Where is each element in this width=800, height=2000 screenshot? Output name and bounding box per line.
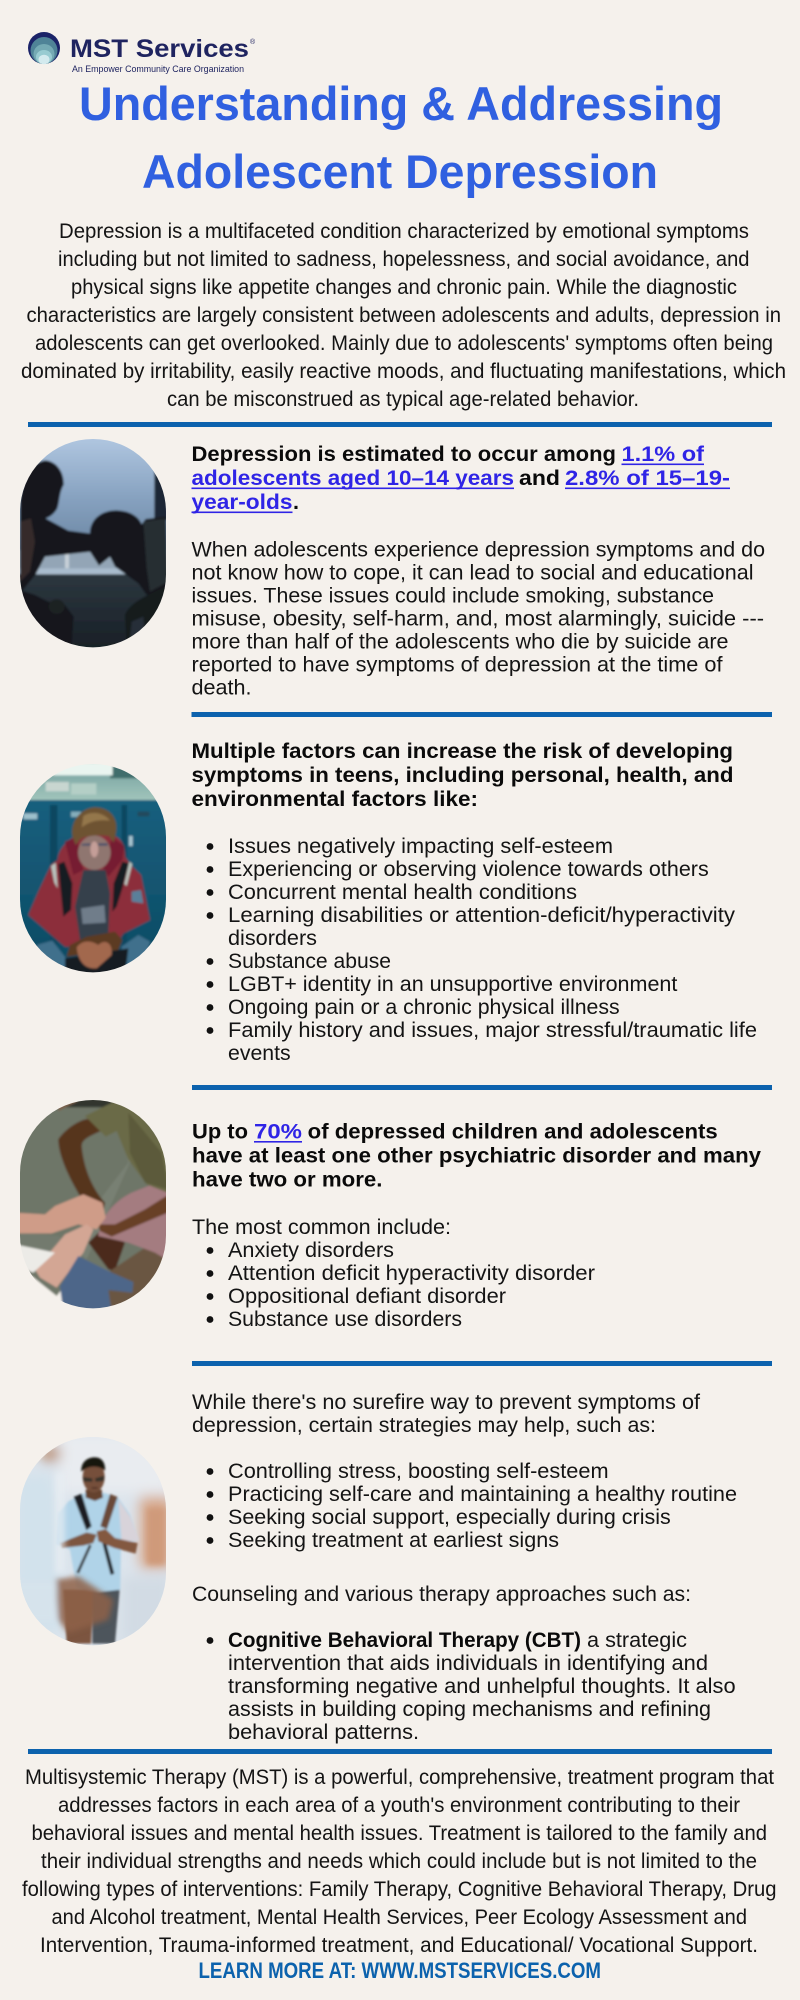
list: cognitive behavioral therapy: behavioral patterns. [228,1721,419,1744]
heading: co-occurring disorders: have at least one other psychiatric disorder and many [192,1144,761,1168]
registered mark: ® [250,38,256,46]
list: cognitive behavioral therapy: transforming negative and unhelpful thoughts. It also [228,1675,736,1698]
logo: MST Services [28,32,256,74]
heading: co-occurring disorders: 70% [254,1120,302,1144]
list: prevention strategies [207,1460,737,1552]
text: about multisystemic therapy [22,1766,776,1957]
heading: depression prevalence: and [519,466,560,490]
list: risk factors [207,835,757,1065]
logo wordmark: MST Services [70,35,249,63]
heading: depression prevalence: year-olds [192,490,293,514]
list: most common disorders: The most common include: [192,1216,451,1239]
text: about multisystemic therapy: and Alcohol treatment, Mental Health Services, Peer Ecology Assessment and [52,1906,747,1929]
list: cognitive behavioral therapy: assists in building coping mechanisms and refining [228,1698,711,1721]
heading: depression prevalence: 1.1% of [622,442,705,466]
heading: co-occurring disorders: Up to [192,1120,248,1144]
list: risk factors: LGBT+ identity in an unsupportive environment [228,973,678,996]
list: cognitive behavioral therapy: Cognitive Behavioral Therapy (CBT) [228,1628,581,1652]
text: about multisystemic therapy: behavioral issues and mental health issues. Treatment is tailored to the family and [32,1822,767,1845]
text: therapy approaches intro: Counseling and various therapy approaches such as: [192,1583,691,1606]
photo: young man with backpack amid blurred crowd [20,1437,166,1646]
heading: depression prevalence [192,442,730,514]
list: risk factors: Experiencing or observing violence towards others [228,858,709,881]
photo: clasped hands [20,1100,166,1308]
heading: depression prevalence: Depression is estimated to occur among [192,442,616,466]
list: risk factors: Ongoing pain or a chronic physical illness [228,996,620,1019]
logo tagline: An Empower Community Care Organization [72,64,244,74]
heading: co-occurring disorders: of depressed children and adolescents [308,1120,718,1144]
photo: teen sitting by school lockers [20,764,166,972]
text: prevention strategies intro: depression, certain strategies may help, such as: [192,1414,656,1437]
list: risk factors: events [228,1042,291,1065]
text: consequences of depression: reported to have symptoms of depression at the time of [192,654,723,676]
list: most common disorders: Attention deficit hyperactivity disorder [228,1262,595,1285]
icon: logo concentric arcs [28,32,60,64]
heading: depression prevalence: adolescents aged 10–14 years [192,466,514,490]
heading: risk factors [192,739,734,811]
text: consequences of depression: issues. These issues could include smoking, substance [192,584,714,608]
title: Adolescent Depression [142,145,658,198]
list: most common disorders: Anxiety disorders [228,1239,394,1262]
heading: risk factors: Multiple factors can increase the risk of developing [192,739,733,763]
list: prevention strategies: Practicing self-care and maintaining a healthy routine [228,1483,737,1506]
intro paragraph: Depression is a multifaceted condition characterized by emotional symptoms [59,220,749,243]
photo: silhouette of two people by a window [20,439,166,648]
text: about multisystemic therapy: Multisystemic Therapy (MST) is a powerful, comprehensive, treatment program that [25,1766,774,1789]
text: about multisystemic therapy: their individual strengths and needs which could include but is not limited to the [41,1850,757,1873]
list: cognitive behavioral therapy: a strategic [587,1629,687,1652]
heading: depression prevalence: 2.8% of 15–19- [565,466,730,490]
title: Understanding & Addressing [79,77,723,130]
list: risk factors: Learning disabilities or attention-deficit/hyperactivity [228,904,736,927]
list: risk factors: Issues negatively impacting self-esteem [228,835,613,858]
text: consequences of depression: more than half of the adolescents who die by suicide are [192,630,728,654]
text: consequences of depression: death. [192,676,252,700]
text: about multisystemic therapy: Intervention, Trauma-informed treatment, and Educational/ Vocational Support. [40,1934,758,1957]
list: prevention strategies: Seeking social support, especially during crisis [228,1506,671,1529]
heading: depression prevalence: . [293,490,299,514]
list: most common disorders [192,1216,595,1331]
intro paragraph: including but not limited to sadness, hopelessness, and social avoidance, and [58,248,750,271]
list: risk factors: Substance abuse [228,950,391,973]
intro paragraph: physical signs like appetite changes and chronic pain. While the diagnostic [71,276,737,299]
list: most common disorders: Substance use disorders [228,1308,462,1331]
text: prevention strategies intro [192,1391,700,1437]
list: risk factors: Family history and issues, major stressful/traumatic life [228,1019,757,1042]
list: risk factors: Concurrent mental health conditions [228,881,577,904]
list: most common disorders: Oppositional defiant disorder [228,1285,506,1308]
list: cognitive behavioral therapy: intervention that aids individuals in identifying and [228,1652,708,1675]
text: prevention strategies intro: While there's no surefire way to prevent symptoms of [192,1391,700,1414]
heading: risk factors: symptoms in teens, including personal, health, and [192,763,734,787]
text: consequences of depression: misuse, obesity, self-harm, and, most alarmingly, suicide --- [192,608,764,630]
intro paragraph [21,220,786,411]
intro paragraph: can be misconstrued as typical age-related behavior. [167,388,639,411]
title [79,77,723,198]
list: risk factors: disorders [228,927,317,950]
panel: co-occurring disorders [15,1096,761,1331]
panel: prevalence and consequences [15,435,765,700]
list: prevention strategies: Controlling stress, boosting self-esteem [228,1460,609,1483]
call to action: website: LEARN MORE AT: WWW.MSTSERVICES.COM [198,1958,601,1983]
text: about multisystemic therapy: addresses factors in each area of a youth's environment contributing to their [58,1794,740,1817]
intro paragraph: characteristics are largely consistent between adolescents and adults, depression in [26,304,781,327]
heading: risk factors: environmental factors like: [192,787,478,811]
heading: co-occurring disorders [192,1120,761,1192]
intro paragraph: dominated by irritability, easily reactive moods, and fluctuating manifestations, which [21,360,786,383]
heading: co-occurring disorders: have two or more. [192,1168,382,1192]
panel: prevention and therapy [15,1391,737,1744]
intro paragraph: adolescents can get overlooked. Mainly due to adolescents' symptoms often being [35,332,773,355]
text: about multisystemic therapy: following types of interventions: Family Therapy, Cognitive Behavioral Therapy, Drug [22,1878,776,1901]
list: cognitive behavioral therapy [207,1628,736,1744]
text: consequences of depression: When adolescents experience depression symptoms and do [192,538,765,562]
panel: risk factors [15,739,757,1065]
text: consequences of depression [192,538,765,700]
text: consequences of depression: not know how to cope, it can lead to social and educational [192,562,754,584]
list: prevention strategies: Seeking treatment at earliest signs [228,1529,559,1552]
